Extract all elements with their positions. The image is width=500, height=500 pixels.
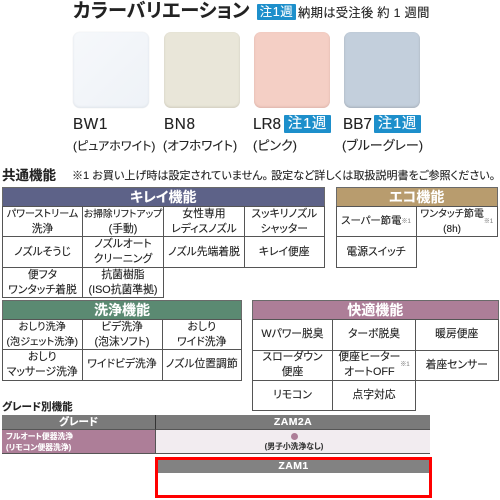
swatch: LR8 xyxy=(254,32,330,108)
header: 洗浄機能 xyxy=(2,300,242,320)
cell xyxy=(415,319,498,350)
cell: ワンタッチ節電 xyxy=(420,208,484,220)
label: BB7: BB7 xyxy=(343,116,372,133)
panel: エコ機能 xyxy=(336,187,498,268)
cell xyxy=(416,206,498,237)
header: キレイ機能 xyxy=(2,187,324,207)
cell: キレイ便座 xyxy=(259,246,310,258)
badge: LR8: 注1週 xyxy=(288,116,327,132)
footnote: ※1 お買い上げ時は設定されていません。 設定など詳しくは取扱説明書をご参照ください。 xyxy=(72,170,495,182)
cell: オートOFF xyxy=(344,366,395,378)
cell: クリーニング xyxy=(94,253,152,265)
cell: シャッター xyxy=(261,222,308,234)
cell xyxy=(82,236,164,268)
header: ZAM1 xyxy=(158,460,429,472)
row label: full auto flush: (リモコン便器洗浄) xyxy=(6,443,71,452)
cell: リモコン xyxy=(273,388,312,400)
header: ZAM2A xyxy=(155,415,430,430)
cell: スローダウン xyxy=(262,351,323,363)
badge: BB7: 注1週 xyxy=(378,116,417,132)
cell xyxy=(82,319,162,350)
cell xyxy=(332,319,416,350)
cell xyxy=(82,206,164,237)
header: エコ機能: エコ機能 xyxy=(389,189,444,205)
panel: ZAM1 highlighted xyxy=(155,457,432,498)
cell: ワイドビデ洗浄 xyxy=(87,358,157,370)
cell xyxy=(2,267,83,298)
header: 洗浄機能: 洗浄機能 xyxy=(94,302,150,318)
cell: ワイド洗浄 xyxy=(177,336,226,348)
cell xyxy=(2,349,82,380)
cell: 便フタ xyxy=(28,268,57,280)
cell: おしり xyxy=(188,320,216,332)
cell xyxy=(332,380,416,410)
header: ZAM2A: ZAM2A xyxy=(274,416,312,428)
cell: ノズルそうじ xyxy=(14,246,71,258)
panel: 快適機能 xyxy=(252,300,499,411)
cell xyxy=(2,236,83,268)
header: エコ機能 xyxy=(336,187,498,207)
cell: (泡沫ソフト) xyxy=(94,336,150,348)
row label: full auto flush: フルオート便器洗浄 xyxy=(6,432,73,441)
cell: 抗菌樹脂 xyxy=(101,268,145,280)
cell: 点字対応 xyxy=(352,388,396,400)
label: LR8: LR8 xyxy=(253,116,281,133)
cell: ノズル位置調節 xyxy=(166,358,238,370)
header: 快適機能 xyxy=(252,300,498,320)
cell: ビデ洗浄 xyxy=(101,320,143,332)
cell xyxy=(82,349,162,380)
cell xyxy=(336,206,416,237)
label: オフホワイト: (オフホワイト) xyxy=(163,139,237,153)
cell xyxy=(252,350,333,380)
swatch: BB7 xyxy=(344,32,420,108)
dot xyxy=(290,432,298,440)
cell xyxy=(2,319,82,350)
cell: Wパワー脱臭 xyxy=(261,328,324,340)
cell: ノズルオート xyxy=(94,238,152,250)
cell xyxy=(163,236,245,268)
cell xyxy=(415,350,498,380)
cell xyxy=(162,349,242,380)
cell xyxy=(332,350,416,380)
header: ZAM1: ZAM1 xyxy=(278,460,309,472)
cell xyxy=(252,380,333,410)
heading: common functions: 共通機能 xyxy=(2,168,56,183)
cell: 着座センサー xyxy=(426,358,488,370)
note: (男子小洗浄なし) xyxy=(265,442,323,450)
cell: (8h) xyxy=(443,224,461,234)
row value: ZAM2A xyxy=(155,430,430,454)
cell: (手動) xyxy=(109,222,137,234)
cell: (ISO抗菌準拠) xyxy=(88,284,157,296)
row label: full auto flush xyxy=(2,430,155,454)
cell xyxy=(244,206,324,237)
label: BW1: BW1 xyxy=(73,116,108,133)
cell xyxy=(336,236,416,268)
cell xyxy=(82,267,164,298)
lead time note: 納期は受注後 約 1 週間 xyxy=(298,6,430,20)
cell xyxy=(252,319,333,350)
cell: (泡ジェット洗浄) xyxy=(6,336,78,348)
cell: スッキリノズル xyxy=(251,208,317,220)
cell xyxy=(244,236,324,268)
header: 快適機能: 快適機能 xyxy=(347,302,403,318)
cell: パワーストリーム xyxy=(7,208,78,220)
cell: スーパー節電 xyxy=(341,216,401,227)
panel: キレイ機能 xyxy=(2,187,325,298)
cell: 電源スイッチ xyxy=(346,246,406,258)
panel: 洗浄機能 xyxy=(2,300,242,381)
cell: ワンタッチ着脱 xyxy=(8,284,77,296)
cell: 暖房便座 xyxy=(435,328,478,340)
cell: ※1 xyxy=(400,362,410,368)
badge: 1 week lead time: 注1週 xyxy=(260,5,293,19)
label: ピンク: (ピンク) xyxy=(253,138,297,153)
cell: ※1 xyxy=(401,218,411,224)
cell: おしり xyxy=(28,351,56,363)
cell: ※1 xyxy=(484,218,493,224)
cell: 便座 xyxy=(282,366,303,378)
cell xyxy=(2,206,83,237)
cell: 女性専用 xyxy=(182,208,226,220)
cell: お掃除リフトアップ xyxy=(84,208,162,220)
heading: grade functions: グレード別機能 xyxy=(2,401,73,413)
swatch: BW1 xyxy=(73,32,149,108)
label: ピュアホワイト: (ピュアホワイト) xyxy=(73,139,155,153)
cell: マッサージ洗浄 xyxy=(7,366,78,378)
label: ブルーグレー: (ブルーグレー) xyxy=(342,138,423,153)
swatch: BN8 xyxy=(164,32,240,108)
header: グレード xyxy=(2,415,155,430)
header: キレイ機能: キレイ機能 xyxy=(130,189,196,205)
cell: おしり洗浄 xyxy=(19,322,66,332)
cell: 洗浄 xyxy=(32,222,53,234)
cell: ターボ脱臭 xyxy=(348,328,400,340)
header: グレード: グレード xyxy=(59,416,98,428)
cell: レディスノズル xyxy=(171,222,237,234)
cell xyxy=(163,206,245,237)
label: BN8: BN8 xyxy=(164,116,196,133)
panel: grade table xyxy=(2,415,430,454)
title: カラーバリエーション xyxy=(73,1,250,22)
cell xyxy=(162,319,242,350)
cell: ノズル先端着脱 xyxy=(168,246,240,258)
cell: 便座ヒーター xyxy=(338,351,400,363)
